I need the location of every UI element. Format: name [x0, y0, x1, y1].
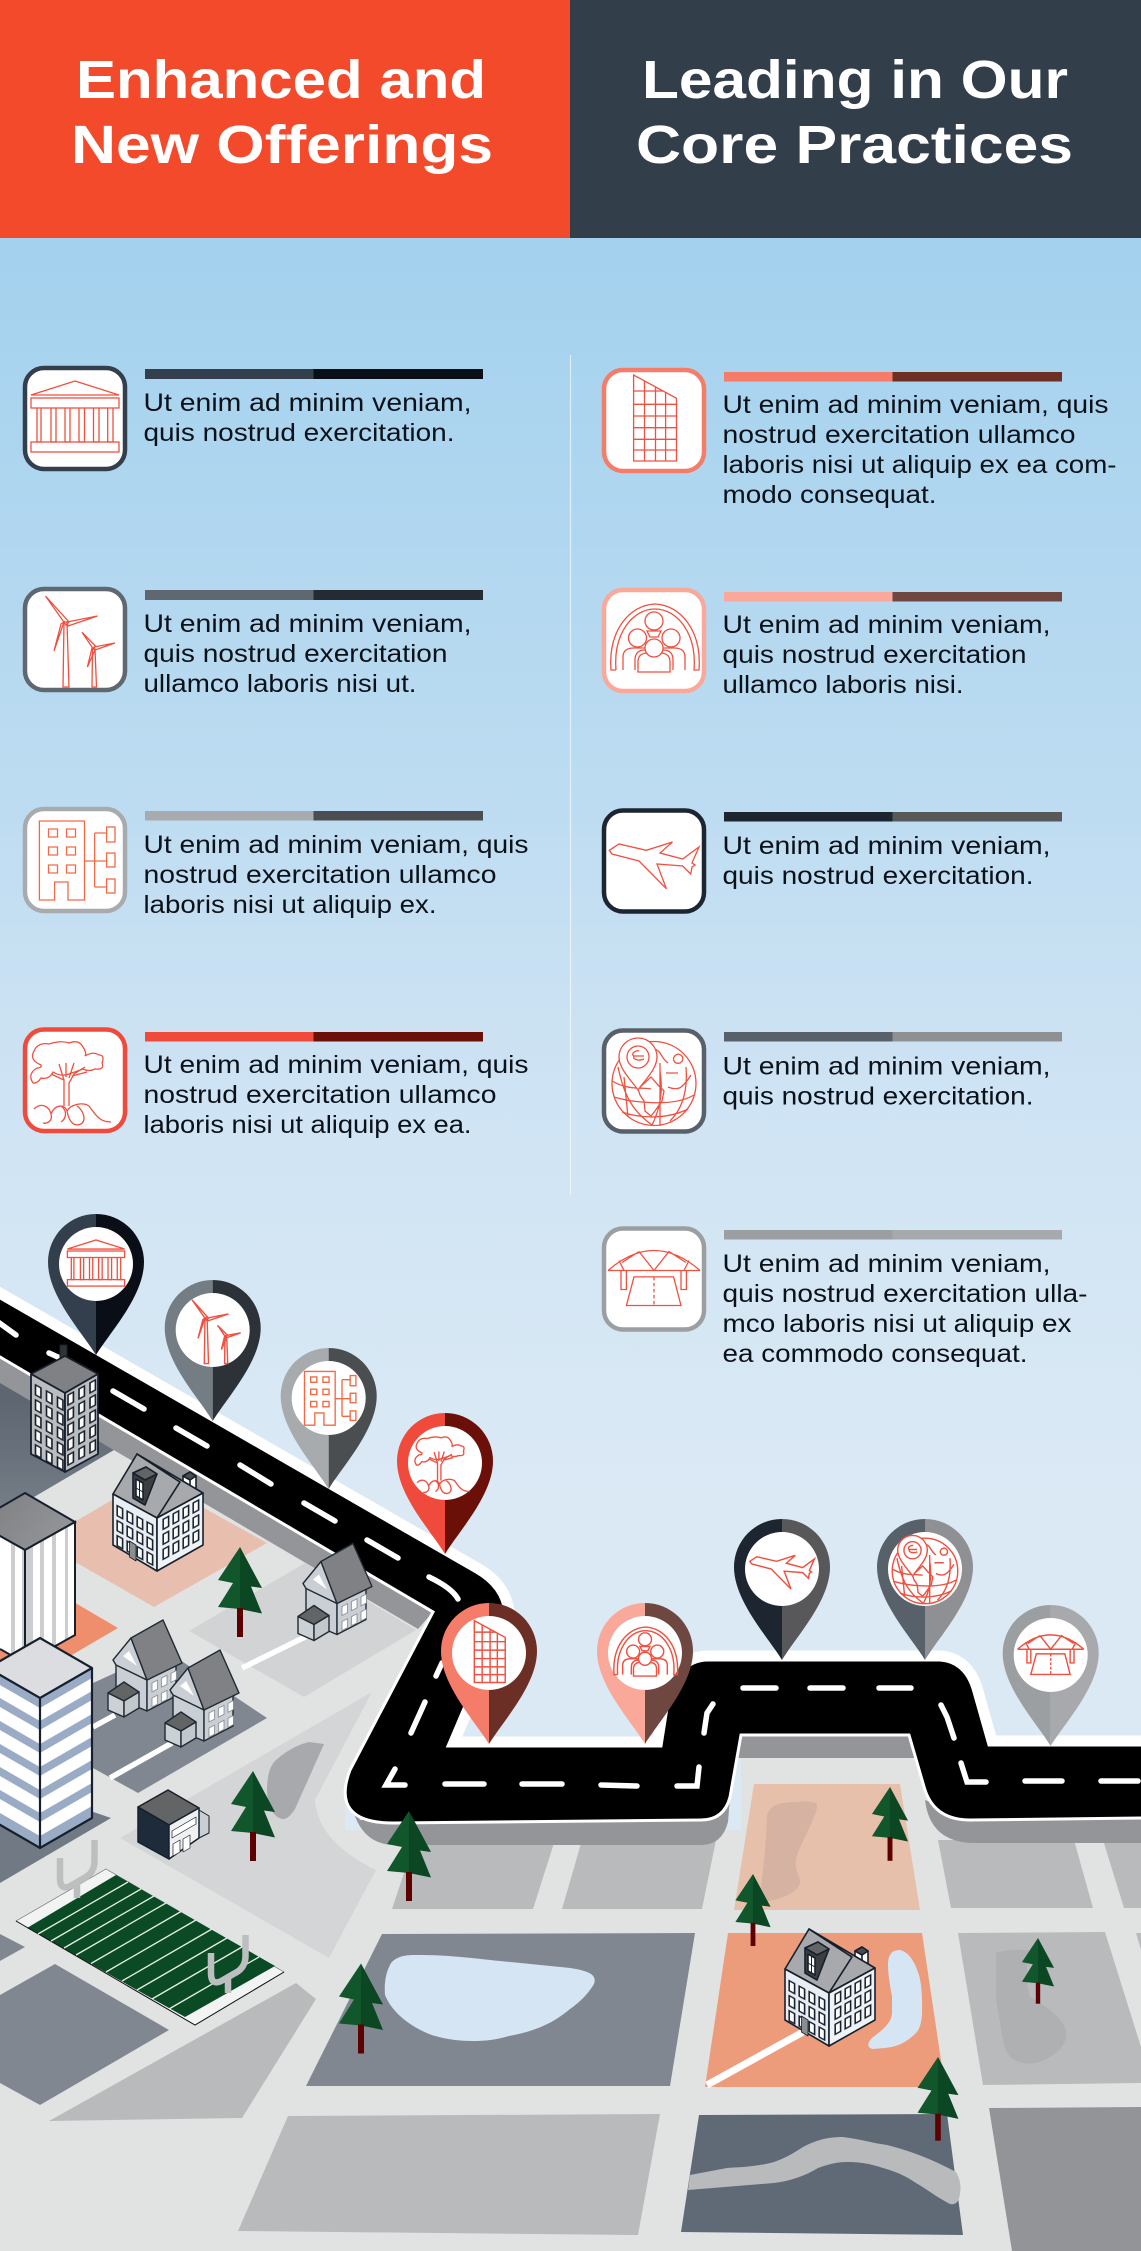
- colour bar: [724, 812, 1062, 822]
- colour bar: [145, 590, 483, 600]
- map: isometric city illustration: [0, 1214, 1141, 2251]
- map pin 1: bank: [48, 1214, 144, 1355]
- header: right dark panel: [570, 0, 1141, 238]
- building: campus house: [785, 1929, 875, 2046]
- road centre dashes: [0, 1322, 1138, 1786]
- map: orange campus block with pond: [705, 1933, 945, 2087]
- panel: item 9 infrastructure: [604, 1228, 1088, 1368]
- building: small house 2: [165, 1650, 239, 1747]
- map: lake block: [306, 1933, 695, 2086]
- text block: Ut enim ad minim veniam,: [722, 832, 1050, 860]
- text block: Ut enim ad minim veniam,: [144, 389, 471, 417]
- header: left red panel: [0, 0, 570, 238]
- map pin 2: wind turbines: [165, 1280, 261, 1421]
- building: white striped tower: [0, 1493, 75, 1663]
- icon: airplane: [604, 810, 704, 912]
- map pin 8: globe: [877, 1519, 973, 1660]
- map pin 5: tower: [441, 1603, 537, 1744]
- panel: item 3 organisation: [25, 809, 528, 919]
- map: road: [0, 1292, 1141, 1845]
- text block: quis nostrud exercitation ulla-: [722, 1280, 1088, 1308]
- colour bar: [724, 1230, 1062, 1240]
- text block: Ut enim ad minim veniam,: [144, 610, 471, 638]
- map: football field: [16, 1869, 284, 2025]
- tree 3: [387, 1811, 431, 1901]
- heading: Enhanced and New Offerings: Enhanced and: [76, 50, 486, 110]
- text block: Ut enim ad minim veniam, quis: [722, 391, 1108, 419]
- colour bar: [724, 592, 1062, 602]
- icon: tree and waves: [25, 1030, 125, 1131]
- heading: Leading in Our Core Practices: Leading in Our: [642, 50, 1068, 110]
- icon: wind turbines: [25, 589, 125, 690]
- panel: item 8 global: [604, 1030, 1062, 1132]
- text block: [144, 831, 528, 919]
- text block: nostrud exercitation ullamco: [722, 421, 1076, 449]
- panel: item 6 people: [604, 590, 1062, 699]
- building: small house 1: [108, 1620, 182, 1717]
- icon: globe with location pin: [604, 1030, 704, 1132]
- tree 8: [918, 2057, 958, 2141]
- heading: Leading in Our Core Practices: Core Practices: [636, 115, 1073, 175]
- text block: quis nostrud exercitation: [144, 640, 448, 668]
- text block: Ut enim ad minim veniam,: [722, 1052, 1050, 1080]
- text block: quis nostrud exercitation.: [144, 419, 454, 447]
- map: blocks below the road: [392, 1840, 1141, 2251]
- building: small dark block: [138, 1790, 209, 1859]
- building: blue striped tower: [0, 1638, 92, 1848]
- map: peach block with pond: [734, 1784, 920, 1910]
- panel: item 5 tower: [604, 370, 1116, 509]
- panel: item 2 wind energy: [25, 589, 483, 698]
- heading: Enhanced and New Offerings: New Offerings: [71, 115, 493, 175]
- text block: nostrud exercitation ullamco: [144, 861, 496, 889]
- colour bar: [145, 369, 483, 379]
- text block: laboris nisi ut aliquip ex ea com-: [722, 451, 1116, 479]
- text block: laboris nisi ut aliquip ex.: [144, 891, 436, 919]
- icon: office tower: [604, 370, 704, 471]
- text block: [722, 391, 1116, 509]
- map: upper left city blocks: [0, 1379, 416, 1883]
- text block: ullamco laboris nisi.: [722, 671, 964, 699]
- goal post left: [60, 1840, 94, 1898]
- text block: nostrud exercitation ullamco: [144, 1081, 496, 1109]
- map: lawn block with grey pond: [120, 1692, 376, 1958]
- colour bar: [724, 1032, 1062, 1042]
- map: lower left blocks: [0, 1934, 660, 2235]
- colour bar: [724, 372, 1062, 382]
- map ground: [0, 1340, 1141, 2251]
- text block: mco laboris nisi ut aliquip ex: [722, 1310, 1072, 1338]
- icon: group of people: [604, 590, 704, 691]
- text block: Ut enim ad minim veniam,: [722, 1250, 1050, 1278]
- text block: [144, 610, 471, 698]
- heading: Leading in Our Core Practices: [636, 50, 1073, 175]
- building: small house 3: [298, 1544, 372, 1640]
- tree 4: [339, 1964, 383, 2054]
- map pin 4: tree: [397, 1413, 493, 1554]
- tree 5: [872, 1787, 908, 1861]
- text block: [144, 389, 471, 447]
- text block: quis nostrud exercitation.: [722, 862, 1034, 890]
- icon: building with org chart: [25, 809, 125, 911]
- panel: item 4 environment: [25, 1030, 528, 1139]
- map pin 7: airplane: [734, 1519, 830, 1660]
- panel: item 7 aviation: [604, 810, 1062, 912]
- text block: Ut enim ad minim veniam, quis: [144, 831, 528, 859]
- text block: Ut enim ad minim veniam, quis: [144, 1051, 528, 1079]
- map pin 9: bridge: [1003, 1605, 1099, 1746]
- text block: [722, 1052, 1050, 1110]
- text block: Ut enim ad minim veniam,: [722, 611, 1050, 639]
- text block: ea commodo consequat.: [722, 1340, 1028, 1368]
- goal post right: [211, 1935, 246, 1993]
- text block: laboris nisi ut aliquip ex ea.: [144, 1111, 472, 1139]
- map pin 6: people: [597, 1603, 693, 1744]
- map: dark block with river: [681, 2114, 963, 2235]
- tree 1: [218, 1547, 262, 1637]
- tree 6: [735, 1874, 771, 1946]
- icon: bank building: [25, 368, 125, 469]
- tree 7: [1022, 1938, 1054, 2004]
- building: tall grey tower: [31, 1345, 98, 1475]
- tree 2: [231, 1771, 275, 1861]
- text block: [722, 1250, 1088, 1368]
- text block: modo consequat.: [722, 481, 936, 509]
- heading: Enhanced and New Offerings: [71, 50, 493, 175]
- colour bar: [145, 811, 483, 820]
- panel: item 1 institutions: [25, 368, 483, 469]
- building: peach block house: [113, 1454, 203, 1571]
- text block: [722, 832, 1050, 890]
- text block: quis nostrud exercitation: [722, 641, 1026, 669]
- map pin 3: org building: [281, 1348, 377, 1489]
- colour bar: [145, 1032, 483, 1042]
- text block: quis nostrud exercitation.: [722, 1082, 1034, 1110]
- text block: ullamco laboris nisi ut.: [144, 670, 416, 698]
- text block: [722, 611, 1050, 699]
- text block: [144, 1051, 528, 1139]
- icon: bridge and road: [604, 1228, 704, 1330]
